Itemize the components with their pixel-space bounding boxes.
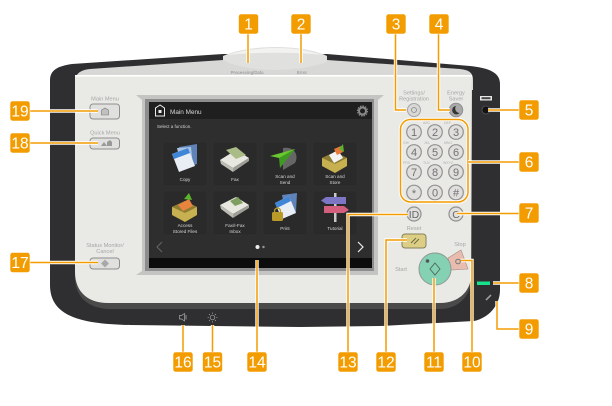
icon: home <box>156 105 164 116</box>
keypad: 0 <box>432 188 438 200</box>
callout 19 <box>10 101 98 121</box>
callout 17: 17 <box>11 255 29 272</box>
keypad: GHI <box>403 141 409 145</box>
main menu button <box>90 104 120 119</box>
screen title: Main Menu <box>170 109 202 116</box>
keypad: 1 <box>411 127 417 139</box>
status dome with indicators <box>223 47 327 75</box>
callout 1 <box>238 14 258 63</box>
keypad: DEF <box>444 121 451 125</box>
page navigation <box>157 242 363 252</box>
callout 4: 4 <box>435 16 444 34</box>
icon: volume <box>180 314 186 321</box>
start button <box>395 253 451 285</box>
callout 2: 2 <box>297 16 305 34</box>
left hardware buttons <box>86 96 124 269</box>
tile: copy: Copy <box>180 177 191 182</box>
callout 1: 1 <box>244 16 253 34</box>
icon: counter <box>480 96 492 100</box>
energy saver label: Saver <box>449 96 463 102</box>
control panel body <box>50 54 500 327</box>
callout 16: 16 <box>174 354 192 372</box>
keypad: * <box>412 188 417 200</box>
energy saver button <box>449 103 463 117</box>
touch screen <box>136 95 384 275</box>
callout 3 <box>386 14 406 110</box>
callout 14 <box>247 260 267 372</box>
callout 7 <box>457 203 539 223</box>
callout 5: 5 <box>525 102 533 120</box>
tile: tutorial: Tutorial <box>327 226 343 231</box>
energy saver label: Energy <box>447 90 465 96</box>
status monitor/cancel label <box>86 243 124 255</box>
quick menu label: Quick Menu <box>90 130 120 136</box>
callout 17 <box>10 252 98 272</box>
callout 15: 15 <box>204 354 221 372</box>
callout 6: 6 <box>525 154 533 172</box>
callout 7: 7 <box>525 206 533 222</box>
keypad: 4 <box>411 147 417 159</box>
settings and energy buttons <box>399 90 465 117</box>
callout 12 <box>376 240 407 372</box>
main power indicator <box>477 282 490 285</box>
callout 15 <box>202 325 222 372</box>
keypad: 3 <box>453 127 459 139</box>
settings/registration label: Settings/ <box>403 90 425 96</box>
id button: ID <box>409 209 420 221</box>
reset button: Reset <box>407 226 422 232</box>
callout 14: 14 <box>248 354 266 372</box>
callout 16 <box>173 325 193 372</box>
keypad: 5 <box>432 147 438 159</box>
keypad: MNO <box>444 141 452 145</box>
callout 4 <box>429 14 450 110</box>
tile: scan and store: Scan and <box>325 174 345 179</box>
keypad: ABC <box>423 121 431 125</box>
start button: Start <box>395 267 407 273</box>
callout 8 <box>493 273 539 293</box>
keypad: 7 <box>411 167 417 179</box>
clear button: C <box>452 209 460 221</box>
tile: scan and store: Store <box>330 180 341 185</box>
tile: fax: Fax <box>231 177 240 182</box>
status monitor button <box>90 258 120 269</box>
status monitor/cancel label: Status Monitor/ <box>86 243 124 249</box>
tile: fax/i-fax inbox: Inbox <box>229 229 241 234</box>
callout 12: 12 <box>377 354 395 372</box>
energy saver label <box>447 90 465 102</box>
callout 9: 9 <box>525 322 533 338</box>
reset button <box>402 226 426 248</box>
callout 10: 10 <box>463 354 481 372</box>
callout 11: 11 <box>426 354 442 372</box>
tile: access stored files <box>163 191 207 235</box>
callout 19: 19 <box>11 104 29 120</box>
keypad <box>403 121 463 200</box>
right side indicators <box>477 96 492 300</box>
tile: print <box>263 191 307 235</box>
callout 13 <box>338 214 408 372</box>
id and clear buttons <box>407 207 463 221</box>
callout 9 <box>497 301 539 339</box>
callout 18 <box>10 133 98 153</box>
tile: scan and send: Send <box>280 180 291 185</box>
callout 3: 3 <box>392 16 400 34</box>
keypad: 2 <box>432 127 438 139</box>
callout 11 <box>424 278 444 372</box>
icon: settings gear <box>358 106 368 116</box>
label: error: Error <box>297 70 307 75</box>
tile: scan and send <box>263 142 307 186</box>
screen bevel <box>136 95 384 275</box>
quick menu button <box>90 138 120 149</box>
icon: stylus pen <box>486 295 491 300</box>
callout 5 <box>488 100 539 120</box>
tile: copy <box>163 142 207 186</box>
tile: scan and store <box>313 142 357 186</box>
tile: fax <box>213 142 257 186</box>
tile: access stored files: Access <box>178 223 193 228</box>
tile: print: Print <box>280 226 290 231</box>
keypad: 9 <box>453 167 459 179</box>
status monitor/cancel label: Cancel <box>96 249 114 255</box>
tile: scan and send: Scan and <box>275 174 295 179</box>
settings/registration label: Registration <box>399 96 429 102</box>
keypad: JKL <box>424 141 430 145</box>
label: processing/data: Processing/Data <box>231 70 264 75</box>
callout 13: 13 <box>339 354 357 372</box>
keypad: # <box>453 188 460 200</box>
keypad: TUV <box>423 161 431 165</box>
counter button <box>482 106 490 114</box>
screen instruction: Select a function. <box>157 124 192 129</box>
callout 10 <box>461 260 482 372</box>
stop button <box>448 242 468 270</box>
settings button <box>408 104 420 116</box>
tile: tutorial <box>313 191 357 235</box>
callout 2 <box>291 14 311 63</box>
tile: access stored files: Stored Files <box>173 229 198 234</box>
tile: fax/i-fax inbox <box>213 191 257 235</box>
settings/registration label <box>399 90 429 102</box>
keypad: 6 <box>453 147 459 159</box>
keypad: WXYZ <box>443 161 454 165</box>
stop button: Stop <box>454 242 466 248</box>
callout 18: 18 <box>11 136 29 152</box>
keypad: 8 <box>432 167 438 179</box>
keypad: PRS <box>403 161 411 165</box>
icon: brightness <box>208 312 218 322</box>
callout 6 <box>400 120 539 202</box>
callout 8: 8 <box>525 276 533 292</box>
main menu label: Main Menu <box>91 96 119 102</box>
tile: fax/i-fax inbox: Fax/I-Fax <box>225 223 245 228</box>
